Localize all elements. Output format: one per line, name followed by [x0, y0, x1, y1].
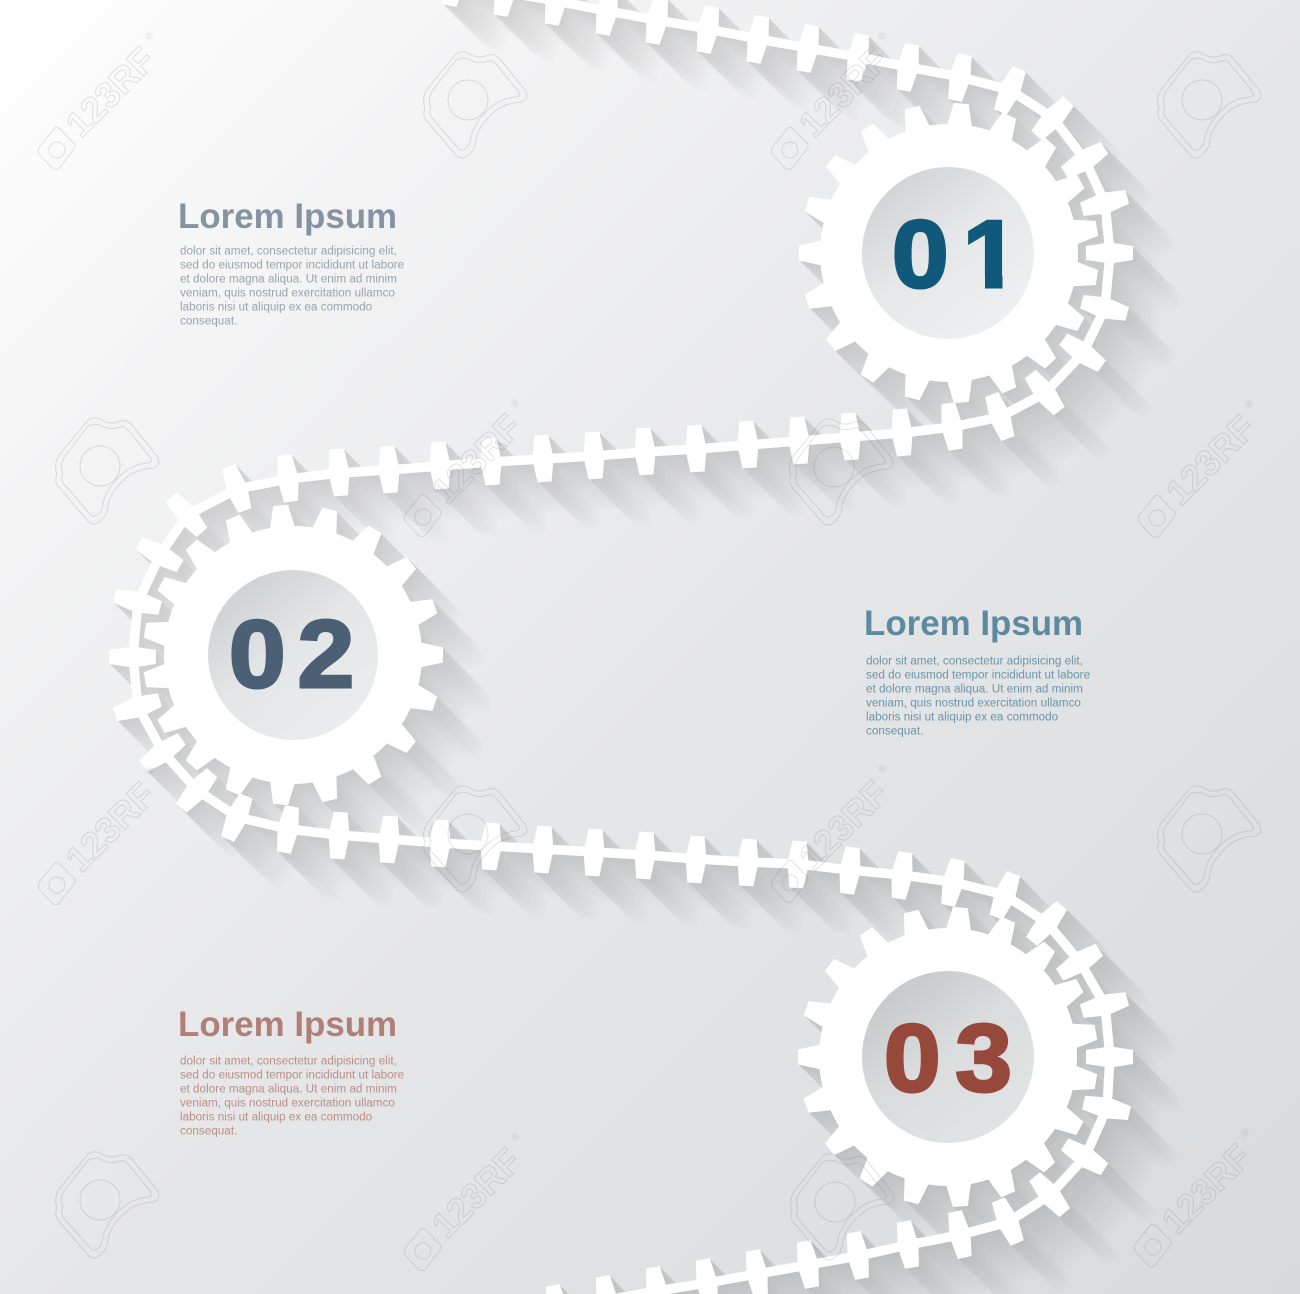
watermark logos: 123RF: [424, 1140, 529, 1246]
gear 01: 0: [892, 200, 949, 307]
text block 2: et dolore magna aliqua. Ut enim ad minim: [866, 682, 1083, 696]
text block 1: laboris nisi ut aliquip ex ea commodo: [180, 300, 373, 314]
watermark logos: 123RF: [58, 774, 163, 880]
chain with teeth: [109, 0, 1133, 1294]
text block 2: [864, 604, 1093, 738]
text block 2: dolor sit amet, consectetur adipisicing elit,: [866, 654, 1083, 668]
text block 3: laboris nisi ut aliquip ex ea commodo: [180, 1110, 373, 1124]
text block 3: consequat.: [180, 1124, 237, 1138]
gear 02: [143, 504, 443, 806]
text block 1: et dolore magna aliqua. Ut enim ad minim: [180, 272, 397, 286]
text block 3: et dolore magna aliqua. Ut enim ad minim: [180, 1082, 397, 1096]
watermark logos: 123RF: [1154, 1136, 1259, 1242]
text block 3: Lorem Ipsum: [178, 1005, 397, 1044]
text block 3: dolor sit amet, consectetur adipisicing elit,: [180, 1054, 397, 1068]
watermark logos: 123RF: [58, 39, 163, 145]
watermark logos: 123RF: [791, 772, 896, 878]
text block 1: dolor sit amet, consectetur adipisicing elit,: [180, 244, 397, 258]
watermark logos: 123RF: [424, 406, 529, 512]
text block 2: laboris nisi ut aliquip ex ea commodo: [866, 710, 1059, 724]
gear 01: 1: [963, 200, 1019, 307]
text block 1: consequat.: [180, 314, 237, 328]
text block 2: veniam, quis nostrud exercitation ullamco: [866, 696, 1081, 710]
text block 3: veniam, quis nostrud exercitation ullamco: [180, 1096, 395, 1110]
text block 2: sed do eiusmod tempor incididunt ut labore: [866, 668, 1090, 682]
text block 2: Lorem Ipsum: [864, 604, 1083, 643]
text block 1: veniam, quis nostrud exercitation ullamco: [180, 286, 395, 300]
text block 1: sed do eiusmod tempor incididunt ut labore: [180, 258, 404, 272]
watermark logos: 123RF: [791, 39, 896, 145]
gear 01: [799, 102, 1099, 404]
gear 03: 03: [884, 1004, 1012, 1111]
text block 3: [178, 1005, 407, 1138]
text block 1: Lorem Ipsum: [178, 197, 397, 236]
text block 3: sed do eiusmod tempor incididunt ut labore: [180, 1068, 404, 1082]
text block 2: consequat.: [866, 724, 923, 738]
text block 1: [178, 197, 407, 328]
watermark logos: 123RF: [1158, 407, 1263, 513]
gear 02: 02: [229, 600, 354, 707]
gear 03: [798, 906, 1098, 1208]
